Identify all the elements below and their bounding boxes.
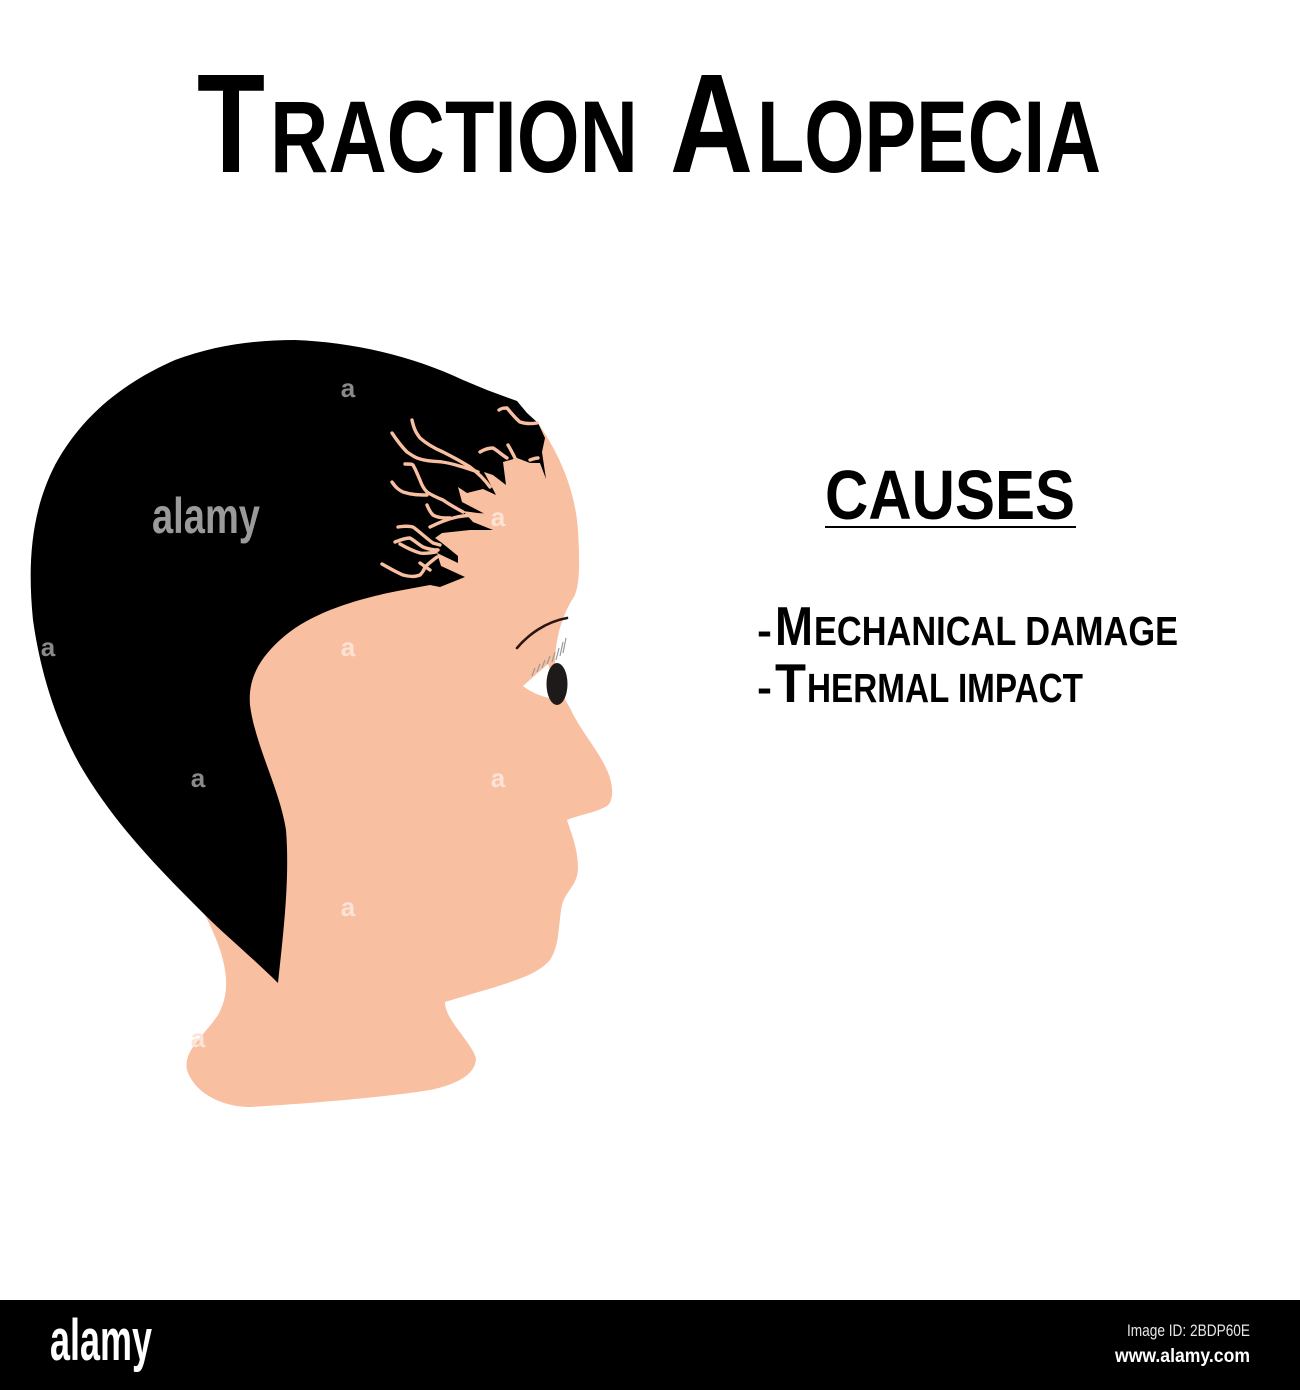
- website: www.alamy.com: [1114, 1346, 1250, 1367]
- eyebrow: [517, 618, 567, 648]
- causes list: M: [775, 595, 813, 657]
- watermark: alamy on hair: alamy: [152, 488, 260, 544]
- thinning hair strands: [382, 408, 538, 576]
- causes list: [757, 595, 1178, 714]
- eye: [517, 618, 568, 705]
- head illustration: [31, 340, 612, 1107]
- causes list: -: [757, 607, 772, 654]
- title: T: [197, 44, 265, 202]
- causes list: T: [775, 652, 806, 714]
- watermark: small marks: a: [491, 763, 506, 793]
- watermark: small marks: a: [341, 373, 356, 403]
- face and neck: [100, 423, 612, 1107]
- eye white: [523, 664, 560, 700]
- eyelashes: [532, 638, 566, 676]
- causes heading: CAUSES: [825, 456, 1075, 534]
- pupil: [546, 663, 568, 705]
- title: A: [670, 44, 753, 202]
- title: LOPECIA: [757, 80, 1101, 194]
- watermark: small marks: a: [41, 632, 56, 662]
- watermark: small marks: [41, 373, 506, 1053]
- title: [197, 44, 1101, 202]
- watermark: small marks: a: [191, 1023, 206, 1053]
- watermark: small marks: a: [491, 502, 506, 532]
- footer logo: alamy: [50, 1308, 152, 1373]
- causes list: -: [757, 664, 772, 711]
- title: RACTION: [270, 80, 638, 194]
- hair: [31, 340, 546, 983]
- watermark: small marks: a: [341, 892, 356, 922]
- watermark: small marks: a: [191, 763, 206, 793]
- footer bar: [0, 1300, 1300, 1390]
- image id: Image ID: 2BDP60E: [1127, 1321, 1250, 1340]
- watermark: small marks: a: [341, 632, 356, 662]
- causes list: HERMAL IMPACT: [807, 665, 1083, 711]
- causes list: ECHANICAL DAMAGE: [814, 608, 1178, 654]
